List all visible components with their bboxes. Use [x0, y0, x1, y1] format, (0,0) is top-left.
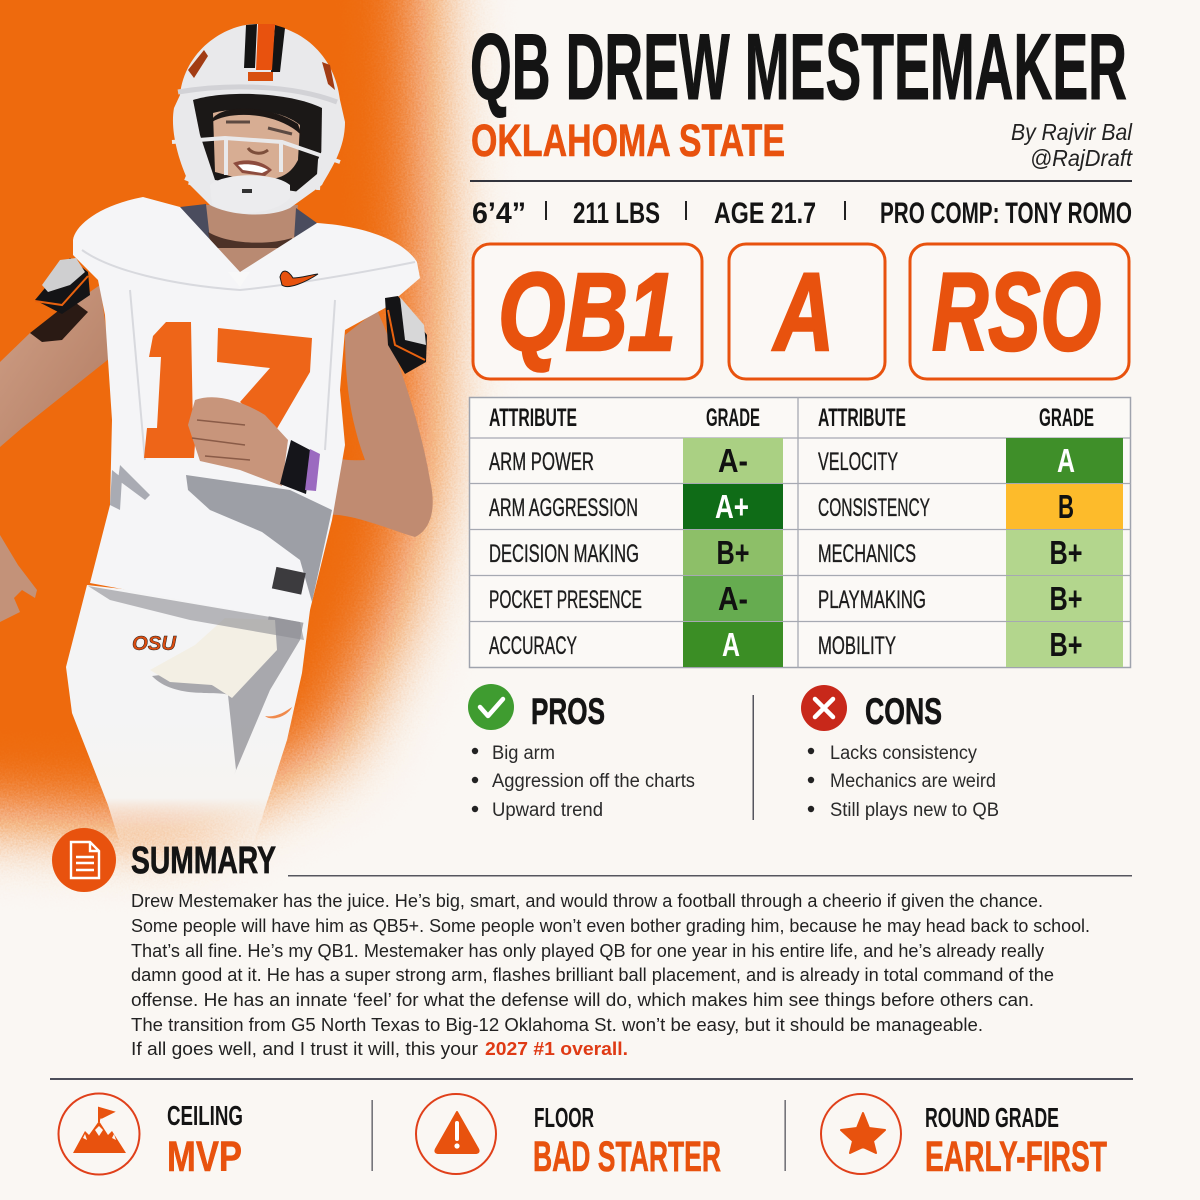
cons heading: CONS: [865, 691, 942, 732]
wristband black: [280, 440, 312, 494]
ceiling label: CEILING: [167, 1100, 243, 1131]
badge: QB1: [473, 244, 702, 379]
pad trim: [35, 276, 88, 305]
summary text: offense. He has an innate ‘feel’ for what the defense will do, which makes him see things before others can.: [131, 989, 1034, 1010]
chest swoosh: [280, 271, 318, 287]
summary panel: [52, 828, 1132, 1059]
table headers: GRADE: [706, 404, 760, 432]
jersey patch: [272, 567, 306, 595]
mask upper bar: [172, 138, 340, 162]
attribute labels left: [489, 448, 642, 660]
neck shadow: [208, 232, 292, 248]
pad light: [400, 297, 426, 345]
attribute labels right: PLAYMAKING: [818, 586, 926, 614]
grades table: [469, 397, 1131, 668]
left shoulder pad: [35, 258, 90, 314]
floor label: FLOOR: [534, 1102, 594, 1133]
left hand: [0, 535, 37, 622]
towel: [150, 618, 277, 698]
number 17: [144, 322, 312, 458]
pants: [66, 585, 310, 860]
OSU helmet logo: [248, 72, 273, 81]
left arm: [0, 285, 110, 447]
summary heading: SUMMARY: [131, 840, 276, 882]
grades right: B+: [1050, 580, 1082, 617]
attribute labels right: MECHANICS: [818, 540, 916, 568]
player photo illustration: [0, 24, 433, 860]
byline: [1011, 119, 1134, 171]
weight: 211 LBS: [573, 197, 660, 230]
attribute labels left: ARM AGGRESSION: [489, 494, 638, 522]
right shoulder pad: [385, 296, 427, 374]
grades right: [1050, 442, 1082, 663]
pad trim: [388, 310, 425, 360]
summary text: [131, 890, 1090, 1059]
nose shadow: [248, 148, 268, 153]
grades left: A: [722, 626, 740, 663]
table headers: GRADE: [1039, 404, 1094, 432]
badge text: RSO: [932, 251, 1101, 374]
arm shadow: [30, 300, 88, 342]
attribute labels right: [818, 448, 930, 660]
digit 1: [144, 322, 196, 458]
helmet side logos: [188, 50, 335, 90]
summary text: That’s all fine. He’s my QB1. Mestemaker has only played QB for one year in his entire life, and he’s already really: [131, 940, 1045, 961]
grades left: [715, 442, 750, 663]
mask vertical bars: [180, 100, 338, 190]
collar shadow: [180, 204, 317, 240]
mouth: [233, 160, 272, 176]
attribute labels left: POCKET PRESENCE: [489, 586, 642, 614]
pad black: [35, 258, 90, 314]
visor rim: [178, 87, 337, 102]
jersey: [73, 197, 420, 623]
grades right: B: [1058, 488, 1074, 525]
mask lower bars: [185, 170, 325, 195]
finger lines: [192, 420, 250, 460]
summary text: Some people will have him as QB5+. Some people won’t even bother grading him, because he may head back to school.: [131, 915, 1090, 936]
badge: RSO: [910, 244, 1129, 379]
age: AGE 21.7: [714, 197, 816, 230]
summary text: If all goes well, and I trust it will, this your: [131, 1038, 478, 1059]
pros heading: PROS: [531, 691, 605, 732]
undershirt patch: [228, 272, 250, 287]
height: 6’4”: [472, 197, 526, 230]
summary text: Drew Mestemaker has the juice. He’s big, smart, and would throw a football through a cheerio if given the chance.: [131, 890, 1043, 911]
chin details: [242, 189, 252, 193]
DSU pants logo: OSU: [132, 633, 177, 655]
orange textured backdrop: [0, 0, 432, 825]
pad black: [385, 296, 427, 374]
neck: [205, 205, 298, 285]
facemask: [172, 100, 340, 195]
grades right: B+: [1050, 534, 1082, 571]
icon: check: [468, 684, 514, 730]
pants swoosh: [265, 707, 292, 718]
jersey shadow: [186, 475, 332, 602]
team name: OKLAHOMA STATE: [471, 115, 785, 166]
grades left: B+: [716, 534, 750, 571]
icon: warning: [416, 1094, 496, 1174]
round grade label: ROUND GRADE: [925, 1102, 1059, 1133]
grades left: A-: [718, 442, 748, 479]
cons panel: [801, 685, 999, 821]
pad light: [42, 258, 85, 292]
attribute labels right: CONSISTENCY: [818, 494, 930, 522]
face: [213, 110, 300, 180]
pros list: Aggression off the charts: [492, 771, 695, 792]
round grade value: EARLY-FIRST: [925, 1133, 1107, 1181]
chin cup: [210, 175, 290, 213]
summary text: The transition from G5 North Texas to Big-12 Oklahoma St. won’t be easy, but it should be manageable.: [131, 1014, 983, 1035]
cons list: [808, 743, 999, 821]
icon: document: [52, 828, 116, 892]
summary text: 2027 #1 overall.: [485, 1038, 628, 1059]
author: By Rajvir Bal: [1011, 119, 1133, 145]
icon: star: [821, 1094, 901, 1174]
attribute labels left: DECISION MAKING: [489, 540, 639, 568]
grade cells: [683, 438, 1123, 667]
stats row: [472, 197, 1132, 230]
eyes: [226, 122, 292, 134]
teeth: [238, 164, 268, 173]
orange stripe: [256, 24, 275, 70]
separators: [546, 201, 845, 220]
throwing hand: [188, 397, 288, 486]
pros list: [472, 743, 695, 821]
helmet: [172, 24, 345, 214]
floor stat: [416, 1094, 721, 1181]
cons list: Mechanics are weird: [830, 771, 996, 792]
shell: [173, 24, 345, 214]
pros list: Upward trend: [492, 800, 603, 821]
handle: @RajDraft: [1030, 145, 1134, 171]
icon: mountain flag: [58, 1094, 140, 1174]
wristband purple: [305, 449, 320, 491]
face opening: [193, 94, 322, 192]
digit 7: [217, 328, 312, 432]
jersey seams: [82, 250, 415, 460]
attribute labels left: ACCURACY: [489, 632, 577, 660]
right arm: [300, 310, 433, 537]
table headers: [489, 404, 1094, 432]
round grade stat: [821, 1094, 1107, 1181]
icon: cross: [801, 685, 847, 731]
side shadow: [110, 465, 150, 510]
brow: [212, 108, 302, 136]
jersey hem shadow: [88, 586, 304, 640]
badge text: QB1: [498, 251, 676, 374]
center stripes: [244, 24, 285, 72]
grades right: A: [1057, 442, 1075, 479]
grades left: A+: [715, 488, 749, 525]
attribute labels right: MOBILITY: [818, 632, 896, 660]
ceiling stat: [58, 1094, 243, 1181]
pros list: Big arm: [492, 743, 555, 764]
attribute labels right: VELOCITY: [818, 448, 898, 476]
badge text: A: [772, 251, 834, 374]
table headers: ATTRIBUTE: [818, 404, 906, 432]
cons list: Still plays new to QB: [830, 800, 999, 821]
grades right: B+: [1050, 626, 1082, 663]
pros panel: [468, 684, 695, 821]
ceiling value: MVP: [167, 1133, 242, 1181]
pants shadow: [152, 610, 305, 775]
floor value: BAD STARTER: [533, 1133, 721, 1181]
cons list: Lacks consistency: [830, 743, 977, 764]
table headers: ATTRIBUTE: [489, 404, 577, 432]
grades left: A-: [718, 580, 748, 617]
badge: grade A: [729, 244, 885, 379]
attribute labels left: ARM POWER: [489, 448, 594, 476]
summary text: damn good at it. He has a super strong arm, flashes brilliant ball placement, and is already in total command of the: [131, 964, 1054, 985]
